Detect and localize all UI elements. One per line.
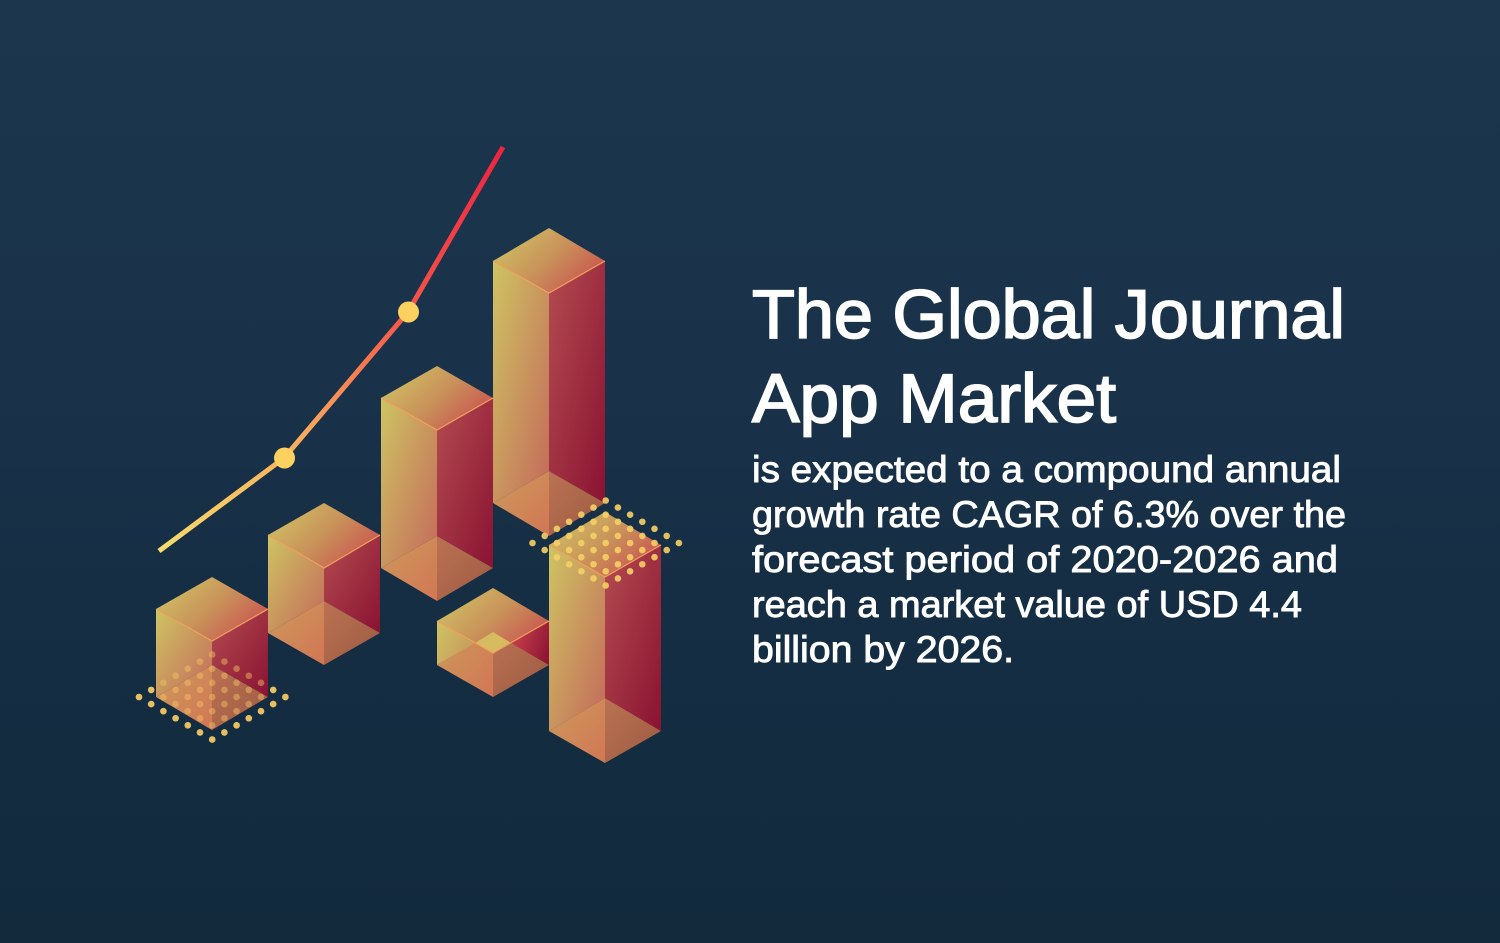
body text: billion by 2026.	[752, 629, 1014, 670]
bar 5	[549, 512, 661, 763]
title	[752, 276, 1345, 437]
dot grid over last bar	[529, 497, 682, 589]
small flat bar	[437, 588, 549, 697]
dot grid under first bar	[136, 651, 289, 743]
body text: is expected to a compound annual	[752, 449, 1341, 490]
dots over first bar	[136, 651, 289, 743]
bar 4	[493, 228, 605, 536]
title: App Market	[752, 360, 1116, 437]
bar 2	[268, 503, 380, 665]
body text	[752, 449, 1346, 670]
trend line	[159, 147, 503, 551]
bar 1	[156, 577, 268, 730]
bar 3	[381, 366, 493, 601]
body text: growth rate CAGR of 6.3% over the	[752, 494, 1346, 535]
illustration: isometric bar chart	[136, 147, 682, 763]
body text: forecast period of 2020-2026 and	[752, 539, 1338, 580]
title: The Global Journal	[752, 276, 1345, 353]
body text: reach a market value of USD 4.4	[752, 584, 1302, 625]
